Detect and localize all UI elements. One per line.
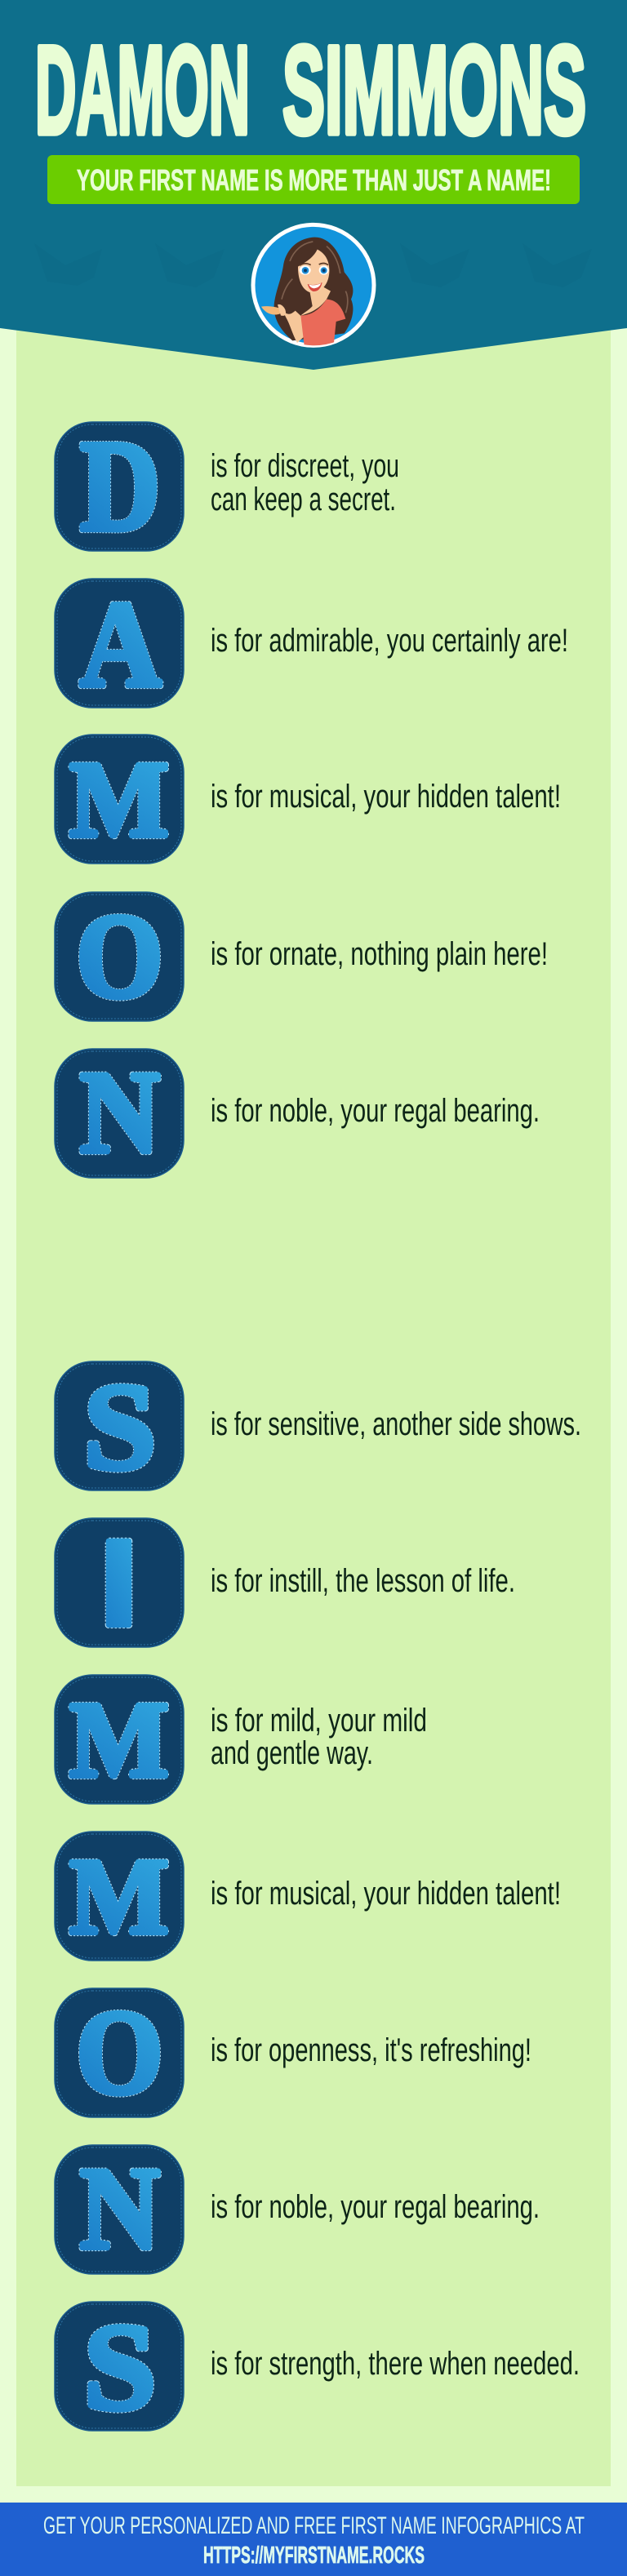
tile: letter I xyxy=(55,1514,184,1651)
tile: letter I: I xyxy=(100,1514,138,1651)
tile: letter N: N xyxy=(80,2144,160,2274)
title: DAMON xyxy=(35,20,250,160)
tile: letter M: M xyxy=(69,739,169,859)
tile: letter N: N xyxy=(80,2144,160,2274)
tile: letter M: M xyxy=(69,1836,169,1956)
text: D line: is for discreet, you xyxy=(211,448,399,484)
tile: letter I: I xyxy=(100,1514,138,1651)
footer xyxy=(0,2503,627,2576)
text: M line xyxy=(211,1703,427,1771)
tile: letter A: A xyxy=(80,575,162,713)
tile: letter S xyxy=(55,1358,184,1495)
tile: letter O: O xyxy=(76,890,163,1024)
text: M line: and gentle way. xyxy=(211,1735,373,1771)
tile: letter S xyxy=(55,2298,184,2436)
tile: letter A: A xyxy=(80,575,162,713)
tile: letter S: S xyxy=(83,1358,156,1495)
tile: letter A xyxy=(55,575,184,713)
tile: letter S: S xyxy=(83,2298,156,2436)
tile: letter N: N xyxy=(80,1048,160,1178)
tile: letter S: S xyxy=(83,2298,156,2436)
tile: letter O: O xyxy=(76,1986,163,2120)
tile: letter S: S xyxy=(83,1358,156,1495)
tile: letter N: N xyxy=(80,1048,160,1178)
tile: letter N xyxy=(55,1048,184,1178)
text: D line: can keep a secret. xyxy=(211,482,396,517)
text: I line: is for instill, the lesson of life. xyxy=(211,1563,515,1599)
subtitle banner xyxy=(47,155,580,204)
tile: letter M: M xyxy=(69,1679,169,1800)
footer text: url: HTTPS://MYFIRSTNAME.ROCKS xyxy=(203,2543,425,2569)
tile: letter O: O xyxy=(76,1986,163,2120)
text: M line: is for mild, your mild xyxy=(211,1703,427,1739)
tile: letter M: M xyxy=(69,739,169,859)
header banner xyxy=(0,0,627,370)
tile: letter O: O xyxy=(76,890,163,1024)
text: D line xyxy=(211,448,399,517)
avatar: cartoon woman in circle xyxy=(253,224,374,345)
tile: letter D: D xyxy=(80,413,160,558)
tile: letter N xyxy=(55,2144,184,2274)
tile: letter M: M xyxy=(69,1836,169,1956)
tile: letter M: M xyxy=(69,1679,169,1800)
tile: letter D: D xyxy=(80,413,160,558)
